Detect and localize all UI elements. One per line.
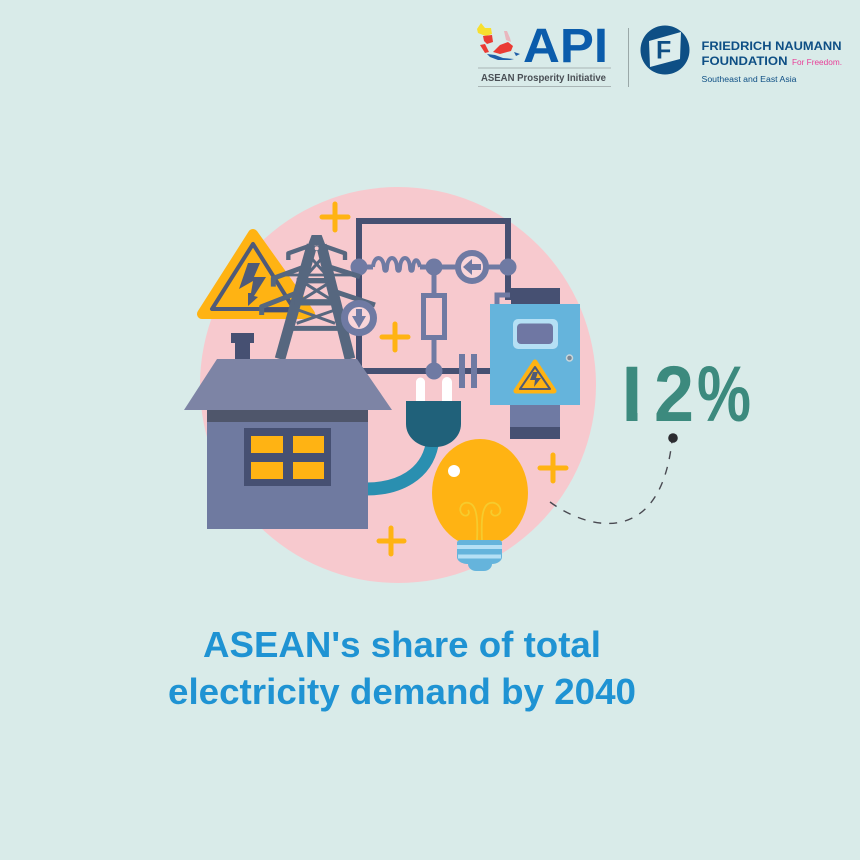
statistic: 12%: 2 (654, 349, 694, 438)
plug prongs (416, 377, 452, 402)
statistic: 12%: 1 (608, 349, 652, 438)
pink background circle (200, 187, 596, 583)
roof (184, 359, 392, 410)
meter box (490, 304, 580, 405)
meter bracket (497, 295, 510, 305)
foundation name: FRIEDRICH NAUMANN (702, 41, 842, 53)
base stripes (457, 547, 502, 556)
icon: electricity meter (490, 288, 580, 439)
cable (366, 445, 432, 489)
dashed connector arrow (550, 433, 678, 523)
API wordmark: API (523, 20, 608, 73)
inductor coil (373, 258, 420, 271)
title: electricity demand by 2040 (168, 671, 636, 712)
logo: Friedrich Naumann Foundation (640, 26, 842, 84)
logo divider (628, 28, 629, 87)
filament (460, 503, 500, 541)
icon: plus right (540, 455, 566, 481)
icon: foundation emblem: F (656, 36, 671, 64)
ASEAN Prosperity Initiative caption: ASEAN Prosperity Initiative (481, 72, 606, 84)
icon: warning triangle (202, 234, 310, 314)
region: Southeast and East Asia (702, 75, 797, 84)
chimney (231, 333, 254, 360)
icon: plug and cable (366, 377, 461, 489)
bulb highlight (448, 465, 460, 477)
logo: ASEAN Prosperity Initiative (477, 20, 611, 86)
icon: house (184, 333, 392, 529)
capacitor (462, 354, 474, 388)
bulb glass (432, 439, 528, 547)
title (168, 624, 636, 712)
nodes (350, 258, 516, 380)
tagline: For Freedom. (792, 57, 842, 67)
meter display (513, 319, 558, 349)
icon: plus top (322, 204, 348, 230)
meter top cap (511, 288, 560, 305)
icon: foundation emblem (640, 26, 690, 74)
icon: ASEAN map (477, 23, 520, 60)
window (244, 428, 331, 486)
roof shadow band (207, 410, 368, 422)
title: ASEAN's share of total (203, 624, 601, 665)
meter bottom cap (510, 427, 560, 439)
inner wire (359, 267, 500, 371)
bulb base (457, 540, 502, 571)
plug body (406, 401, 461, 447)
statistic: 12%: % (697, 349, 751, 438)
source with left arrow (458, 253, 486, 281)
icon: plus bottom (379, 528, 404, 554)
icon: light bulb (432, 439, 528, 571)
wall (207, 410, 368, 529)
foundation name line two: FOUNDATION (702, 56, 788, 68)
outer wire (359, 221, 508, 380)
resistor (424, 296, 444, 338)
circuit diagram (350, 221, 516, 388)
meter bottom block (510, 405, 560, 427)
icon: plus middle (382, 324, 408, 350)
meter warning sign (516, 362, 554, 391)
logo rules (478, 68, 611, 86)
meter screw (566, 355, 572, 361)
statistic: 12% (626, 366, 750, 422)
source with down arrow (344, 304, 374, 332)
icon: transmission tower (260, 235, 375, 359)
